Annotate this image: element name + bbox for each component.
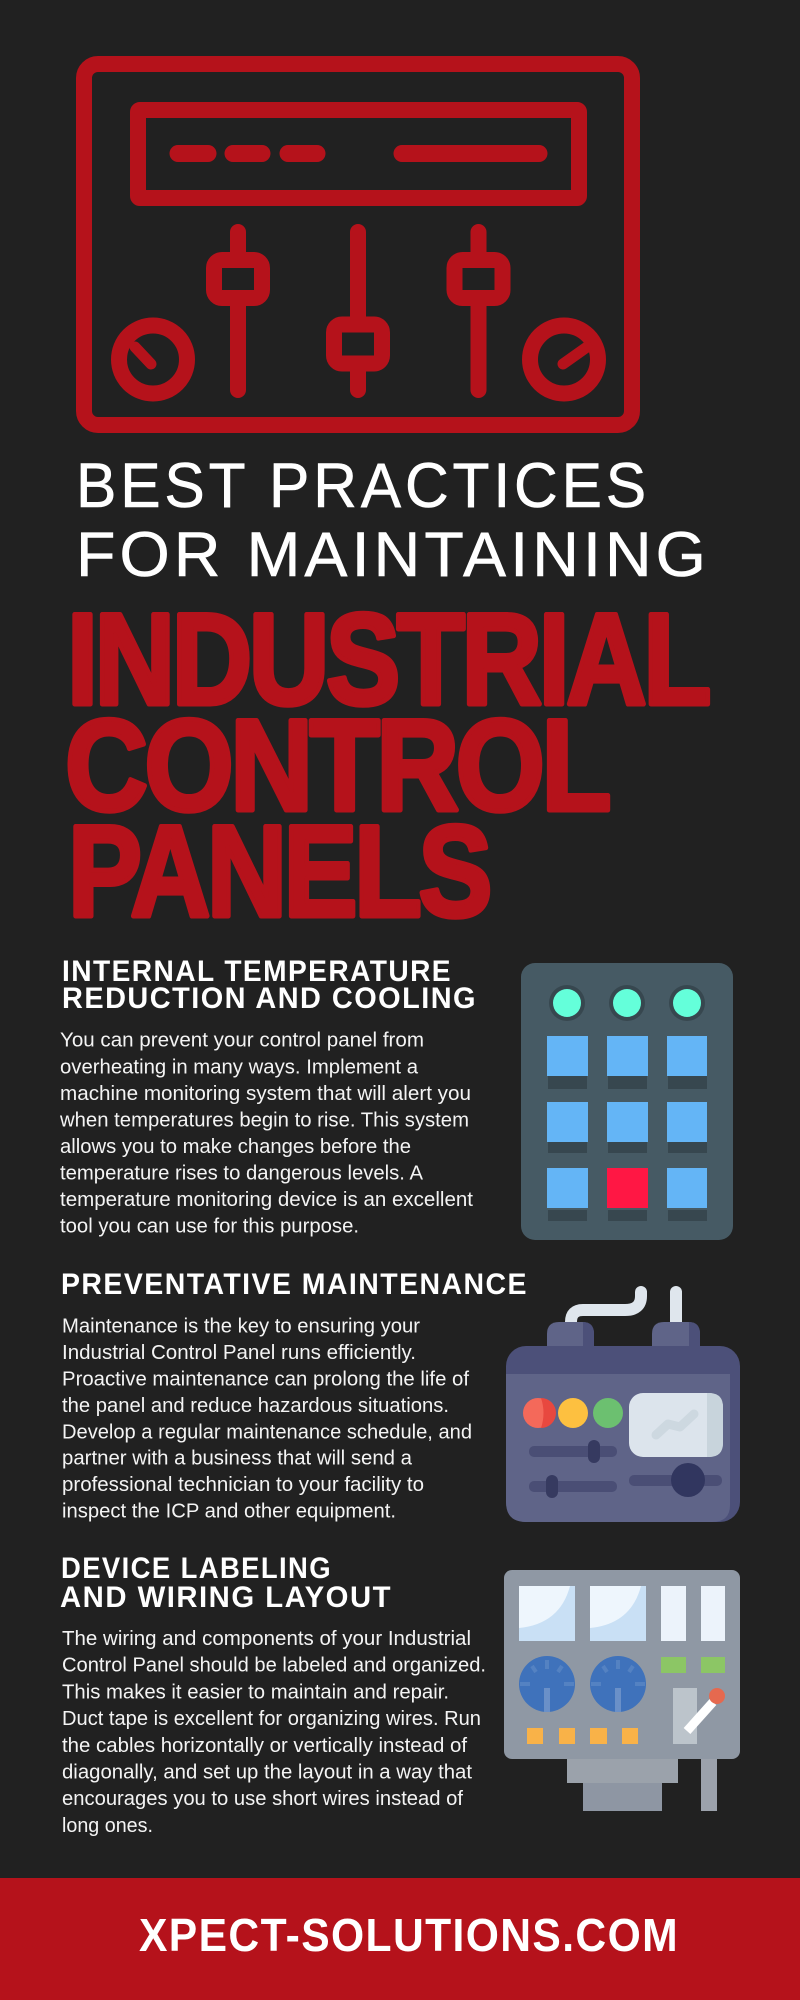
panel: preventative maintenance <box>61 1268 740 1522</box>
icon: battery style control box <box>506 1292 740 1522</box>
body text <box>62 1315 472 1522</box>
heading <box>60 1552 392 1614</box>
icon: red control panel outline <box>84 64 632 425</box>
body text: overheating in many ways. Implement a <box>60 1055 419 1078</box>
body text: You can prevent your control panel from <box>60 1029 424 1052</box>
body text: long ones. <box>62 1814 153 1837</box>
title: best practices for maintaining: FOR MAINTAINING <box>76 520 710 590</box>
body text: the panel and reduce hazardous situations. <box>62 1394 449 1417</box>
body text: Duct tape is excellent for organizing wires. Run <box>62 1707 481 1730</box>
body text: when temperatures begin to rise. This system <box>59 1108 469 1131</box>
body text <box>59 1029 473 1238</box>
icon: button panel <box>521 963 733 1240</box>
body text: partner with a business that will send a <box>62 1447 413 1470</box>
body text: diagonally, and set up the layout in a way that <box>62 1760 472 1784</box>
icon: grey switch panel <box>504 1570 740 1811</box>
body text: Control Panel should be labeled and organized. <box>62 1654 486 1677</box>
title: best practices for maintaining <box>76 451 710 590</box>
body text: professional technician to your facility to <box>62 1473 424 1496</box>
panel: internal temperature reduction and cooling <box>59 955 733 1240</box>
body text: temperature rises to dangerous levels. A <box>60 1162 423 1185</box>
title: industrial control panels: PANELS <box>68 798 489 944</box>
body text <box>62 1627 486 1837</box>
title: best practices for maintaining: BEST PRACTICES <box>76 451 650 521</box>
body text: the cables horizontally or vertically instead of <box>62 1734 467 1757</box>
heading <box>62 955 477 1015</box>
panel: device labeling and wiring layout <box>60 1552 740 1837</box>
body text: Maintenance is the key to ensuring your <box>62 1315 420 1338</box>
footer url: XPECT-SOLUTIONS.COM <box>139 1909 679 1961</box>
title: industrial control panels: CONTROL <box>65 692 609 838</box>
body text: Proactive maintenance can prolong the life of <box>62 1368 469 1390</box>
body text: inspect the ICP and other equipment. <box>62 1499 396 1522</box>
heading: PREVENTATIVE MAINTENANCE <box>61 1268 528 1301</box>
body text: machine monitoring system that will alert you <box>60 1082 471 1105</box>
heading: AND WIRING LAYOUT <box>60 1581 392 1614</box>
body text: allows you to make changes before the <box>60 1135 411 1158</box>
body text: tool you can use for this purpose. <box>60 1215 359 1238</box>
body text: encourages you to use short wires instead of <box>62 1787 463 1810</box>
body text: This makes it easier to maintain and repair. <box>62 1680 449 1703</box>
body text: temperature monitoring device is an excellent <box>60 1188 473 1211</box>
footer band <box>0 1878 800 2000</box>
body text: Industrial Control Panel runs efficiently. <box>62 1341 416 1364</box>
body text: The wiring and components of your Industrial <box>62 1627 471 1650</box>
heading: INTERNAL TEMPERATURE <box>62 955 452 988</box>
title: industrial control panels <box>65 586 708 944</box>
body text: Develop a regular maintenance schedule, and <box>62 1420 472 1443</box>
title: industrial control panels: INDUSTRIAL <box>67 586 708 732</box>
heading: REDUCTION AND COOLING <box>62 982 477 1015</box>
heading: DEVICE LABELING <box>61 1552 332 1585</box>
